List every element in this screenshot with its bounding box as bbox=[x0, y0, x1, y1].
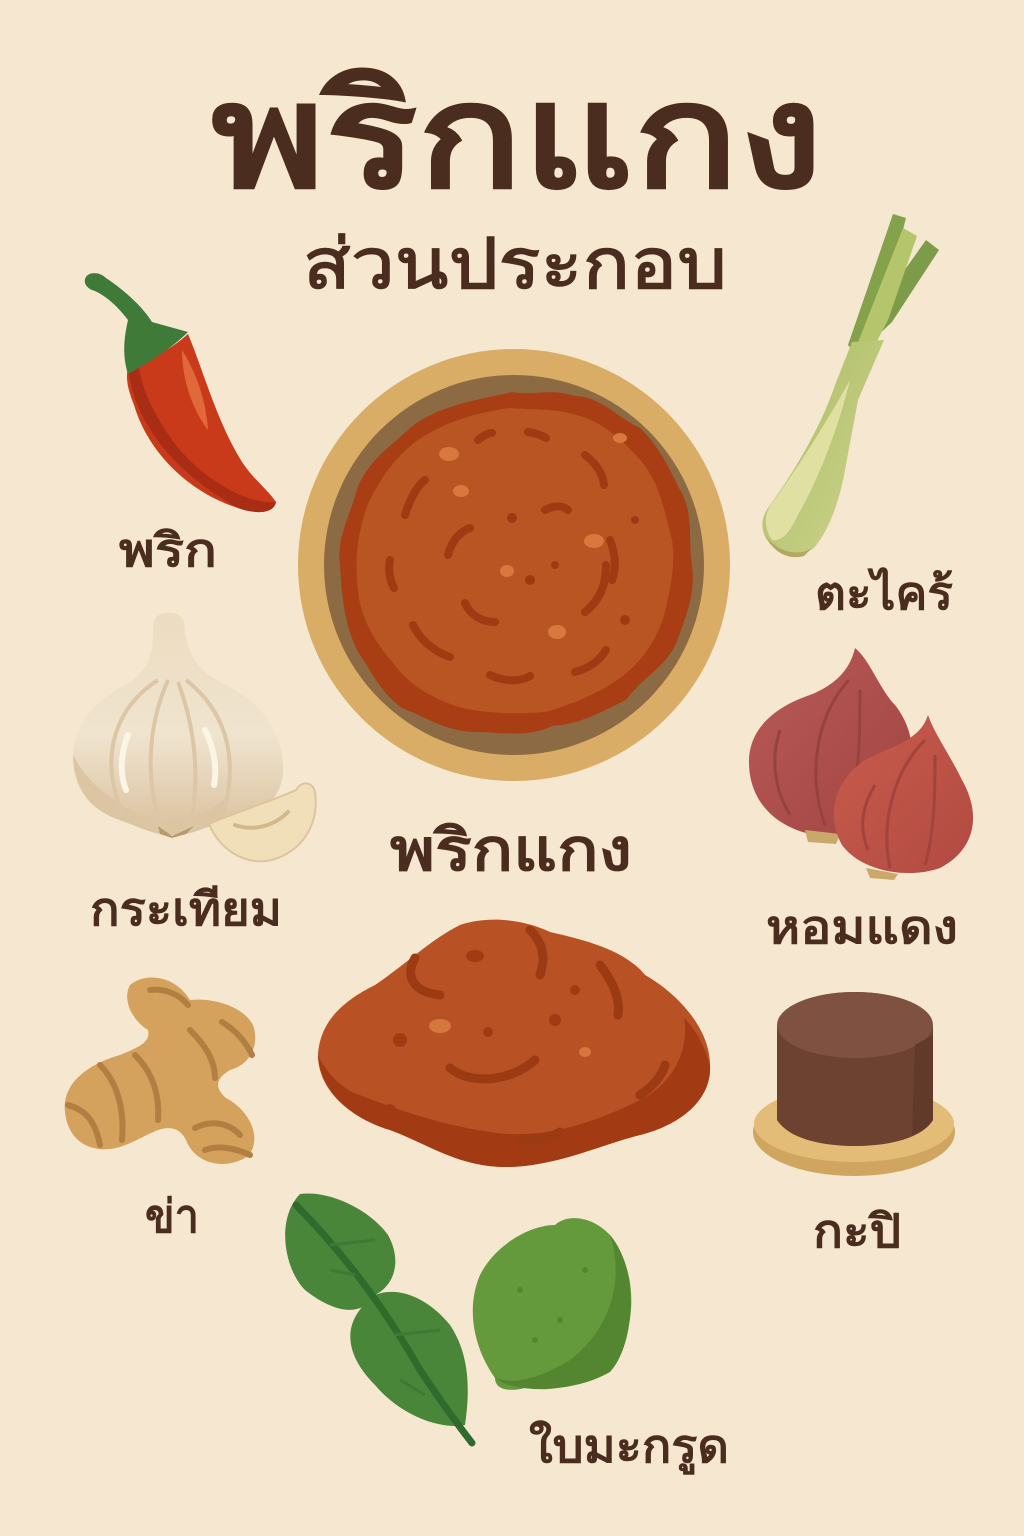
icon: kaffir lime leaves bbox=[285, 1193, 472, 1443]
icon: shrimp paste bbox=[753, 992, 955, 1176]
icon: kaffir lime bbox=[473, 1218, 631, 1390]
title: พริกแกง bbox=[211, 55, 823, 218]
icon: shallots bbox=[749, 648, 973, 880]
icon: lemongrass bbox=[762, 214, 939, 557]
label: shrimp paste: กะปิ bbox=[813, 1205, 901, 1257]
label: garlic: กระเทียม bbox=[90, 883, 282, 935]
icon: chili bbox=[85, 273, 276, 512]
bowl of curry paste bbox=[298, 349, 730, 781]
label: lemongrass: ตะไคร้ bbox=[815, 567, 953, 619]
label: shallots: หอมแดง bbox=[766, 901, 958, 953]
icon: garlic bbox=[73, 613, 316, 861]
label: chili: พริก bbox=[119, 524, 217, 576]
icon: galangal bbox=[65, 977, 255, 1164]
label: galangal: ข่า bbox=[145, 1190, 199, 1242]
label: curry paste: พริกแกง bbox=[390, 818, 632, 883]
subtitle: ส่วนประกอบ bbox=[303, 225, 727, 303]
label: kaffir lime: ใบมะกรูด bbox=[529, 1419, 729, 1475]
curry paste mound bbox=[318, 920, 710, 1167]
